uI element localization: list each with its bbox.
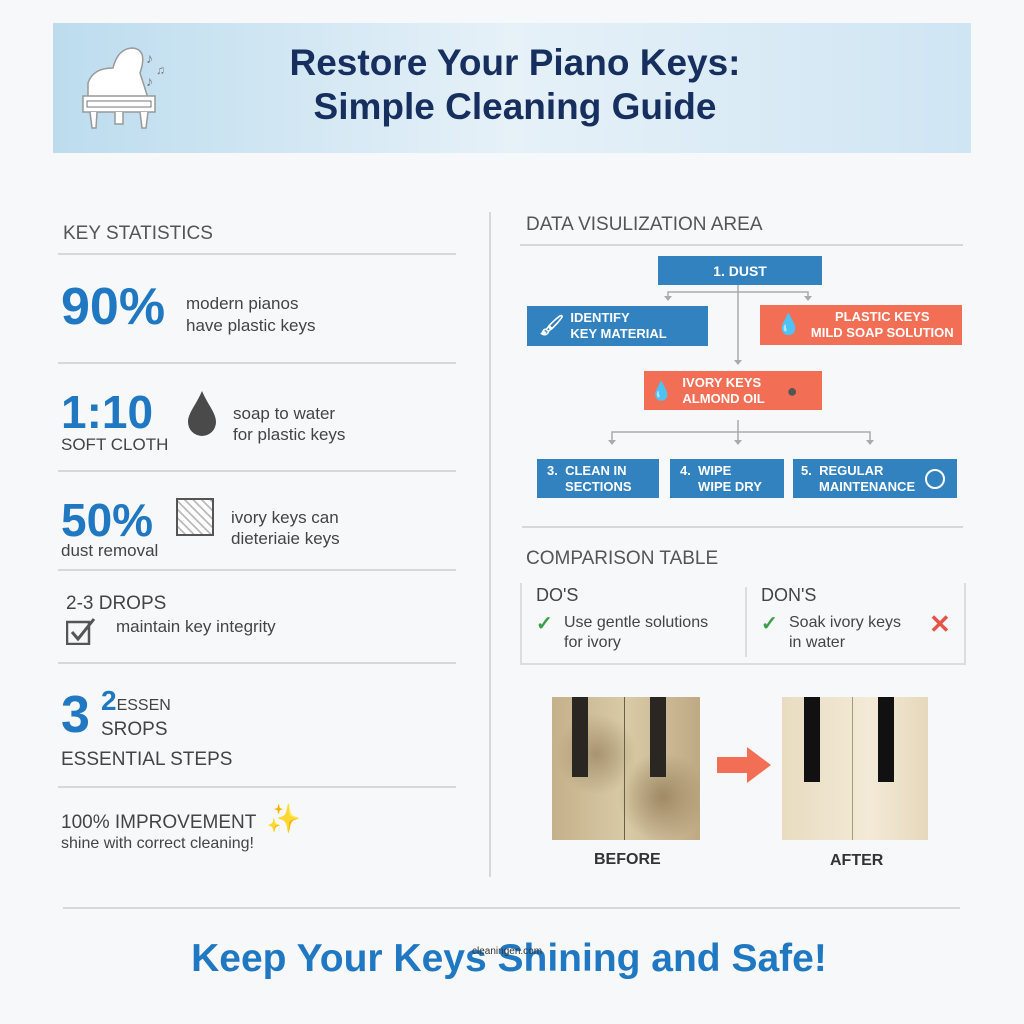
- label after: AFTER: [830, 852, 883, 869]
- stat 2-3 drops: maintain key integrity: [116, 617, 276, 636]
- heading: DATA VISULIZATION AREA: [526, 214, 762, 235]
- stat 2-3 drops: 2-3 DROPS: [66, 593, 166, 614]
- box: step 5: MAINTENANCE: [819, 478, 915, 494]
- stat 90%: [61, 278, 315, 336]
- box: 1 dust: [658, 256, 822, 285]
- before image: [552, 697, 700, 840]
- box: 1 dust: 1. DUST: [713, 262, 767, 278]
- icon: piano: ♫: [156, 63, 165, 77]
- don'ts: ✓: [761, 613, 778, 635]
- do's: [536, 585, 708, 651]
- don'ts: in water: [789, 634, 845, 651]
- icon: piano: ♪: [146, 50, 153, 66]
- stat 50%: 50%: [61, 494, 153, 546]
- don'ts: Soak ivory keys: [789, 614, 901, 631]
- stat 90%: modern pianos: [186, 294, 298, 313]
- box: ivory keys: IVORY KEYS: [682, 374, 761, 390]
- icon: piano: ♪: [146, 73, 153, 89]
- box: step 4: WIPE DRY: [698, 478, 762, 494]
- footer tagline: Keep Your Keys Shining and Safe!: [191, 937, 827, 980]
- box: step 5: [793, 459, 957, 498]
- box: step 4: 4. WIPE: [680, 462, 731, 478]
- stat 3 essential steps: 3: [61, 686, 90, 744]
- stat 50%: ivory keys can: [231, 508, 339, 527]
- box: step 5: 5. REGULAR: [801, 462, 883, 478]
- box: step 4: [670, 459, 784, 498]
- box: plastic keys: PLASTIC KEYS: [835, 309, 930, 324]
- box: plastic keys: [760, 305, 962, 345]
- stat 50%: dust removal: [61, 541, 158, 560]
- text: cleaningen.com: [472, 946, 542, 957]
- stat 100% improvement: 100% IMPROVEMENT: [61, 812, 256, 833]
- stat 100% improvement: [61, 803, 301, 852]
- box: step 3: SECTIONS: [565, 478, 632, 494]
- box: identify key material: [527, 306, 708, 346]
- icon: piano: [82, 47, 165, 129]
- panel: comparison table: [520, 548, 966, 665]
- don'ts: ✕: [929, 609, 951, 639]
- title: Restore Your Piano Keys:: [290, 42, 740, 83]
- box: plastic keys: 💧: [776, 314, 801, 336]
- do's: ✓: [536, 613, 553, 635]
- stat 50%: dieteriaie keys: [231, 529, 340, 548]
- stat 3 essential steps: [61, 685, 232, 770]
- heading: COMPARISON TABLE: [526, 548, 718, 569]
- stat 1:10: soap to water: [233, 404, 335, 423]
- stat 1:10: SOFT CLOTH: [61, 435, 168, 454]
- stat 3 essential steps: ESSENTIAL STEPS: [61, 749, 232, 770]
- stat 1:10: 1:10: [61, 386, 153, 438]
- stat 100% improvement: shine with correct cleaning!: [61, 835, 254, 852]
- box: step 3: 3. CLEAN IN: [547, 462, 626, 478]
- stat 90%: 90%: [61, 278, 165, 336]
- stat 3 essential steps: 2ESSEN: [101, 685, 171, 716]
- box: ivory keys: ALMOND OIL: [682, 390, 765, 406]
- stat 1:10: for plastic keys: [233, 425, 345, 444]
- stat 100% improvement: ✨: [266, 803, 301, 834]
- box: identify key material: IDENTIFY: [570, 310, 630, 325]
- title: [290, 42, 740, 127]
- panel: data visualization: [520, 214, 963, 498]
- label before: BEFORE: [594, 851, 661, 868]
- stat 90%: have plastic keys: [186, 316, 315, 335]
- box: identify key material: KEY MATERIAL: [570, 326, 667, 341]
- do's: DO'S: [536, 585, 578, 605]
- box: ivory keys: 💧: [650, 380, 672, 400]
- do's: for ivory: [564, 634, 621, 651]
- title: Simple Cleaning Guide: [314, 86, 716, 127]
- don'ts: [761, 585, 951, 651]
- box: identify key material: 🖌: [539, 315, 564, 337]
- header banner: [53, 23, 971, 153]
- stat 3 essential steps: SROPS: [101, 719, 168, 740]
- box: step 3: [537, 459, 659, 498]
- panel: key statistics: [58, 223, 456, 852]
- flowchart: [608, 285, 874, 445]
- arrow: [717, 747, 771, 783]
- box: ivory keys: [644, 371, 822, 410]
- stat 50%: [61, 494, 340, 560]
- after image: [782, 697, 928, 840]
- stat 1:10: [61, 386, 345, 454]
- box: plastic keys: MILD SOAP SOLUTION: [811, 325, 954, 340]
- box: ivory keys: ●: [787, 380, 798, 400]
- do's: Use gentle solutions: [564, 614, 708, 631]
- don'ts: DON'S: [761, 585, 816, 605]
- stat 2-3 drops: [66, 593, 276, 645]
- heading: KEY STATISTICS: [63, 223, 213, 244]
